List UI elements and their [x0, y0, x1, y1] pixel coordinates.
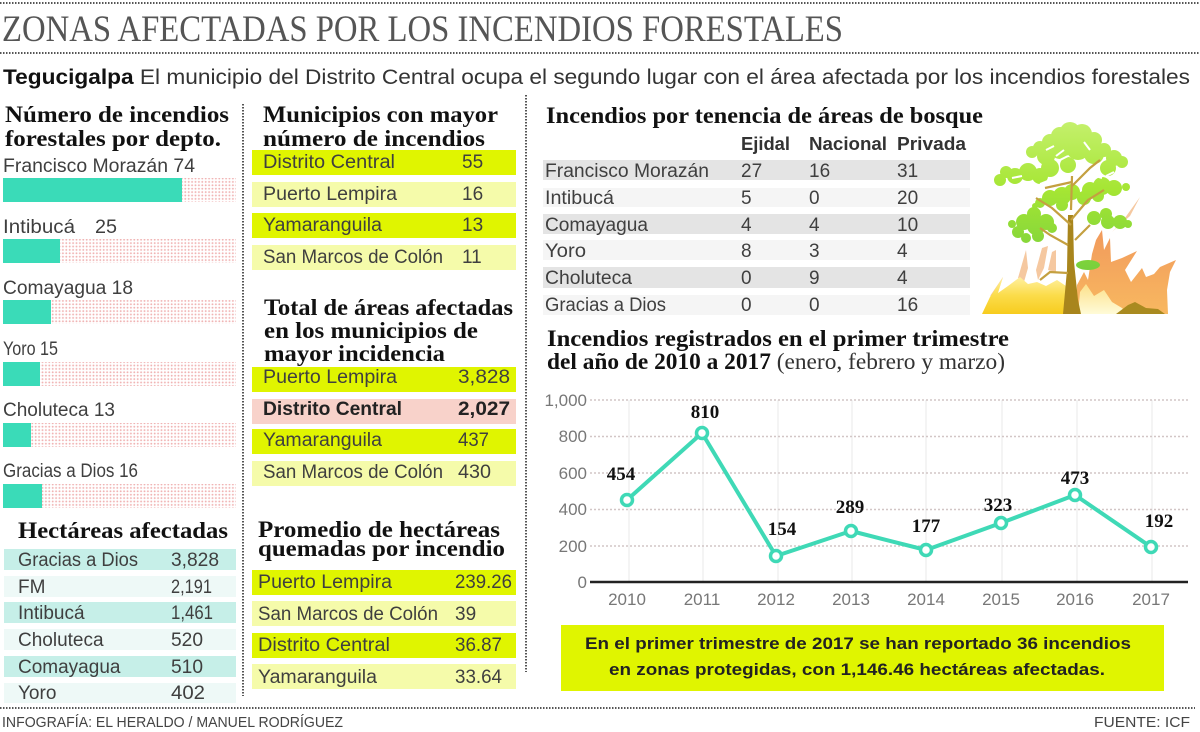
table: hectáreas: 1,461	[171, 603, 213, 624]
table: promedio: 36.87	[455, 635, 502, 656]
table: promedio: Distrito Central	[258, 635, 390, 656]
table: tenencia: 31	[897, 161, 918, 182]
table: tenencia: 4	[897, 241, 908, 262]
data line	[622, 428, 1156, 562]
panel: municipios con mayor número de incendios	[252, 102, 516, 270]
y axis labels: 800	[559, 427, 587, 446]
table: municipios: Distrito Central	[263, 152, 395, 173]
table: tenencia	[543, 134, 970, 316]
heading: total de áreas: mayor incidencia	[264, 341, 446, 366]
branches and trunk	[1036, 160, 1104, 314]
table: hectáreas: Choluteca	[18, 630, 104, 651]
table: tenencia: 10	[897, 215, 918, 236]
data values: 810	[691, 402, 719, 423]
bar: Francisco Morazán	[3, 156, 236, 202]
table: tenencia: Choluteca	[545, 268, 632, 289]
table: promedio: San Marcos de Colón	[258, 604, 438, 625]
x axis labels: 2016	[1056, 590, 1094, 609]
bar: Yoro: Yoro 15	[3, 339, 58, 360]
bar: Francisco Morazán: Francisco Morazán 74	[3, 156, 195, 177]
data values: 192	[1145, 511, 1173, 532]
table: total de áreas: 430	[458, 462, 491, 483]
panel: promedio de hectáreas quemadas	[252, 517, 516, 689]
table: hectáreas	[4, 549, 236, 704]
credit: INFOGRAFÍA: EL HERALDO / MANUEL RODRÍGUEZ	[2, 714, 343, 731]
source: FUENTE: ICF	[1094, 714, 1190, 731]
table: total de áreas: Yamaranguila	[263, 430, 382, 451]
table: tenencia: 5	[741, 188, 752, 209]
y axis labels	[544, 391, 587, 592]
table: total de áreas: 437	[458, 430, 489, 451]
heading: promedio: quemadas por incendio	[258, 536, 505, 561]
table: hectáreas: FM	[18, 577, 45, 598]
table: hectáreas: 520	[171, 630, 203, 651]
icon: burning tree	[982, 122, 1176, 314]
table: hectáreas: Yoro	[18, 683, 56, 704]
heading: promedio: Promedio de hectáreas	[258, 517, 500, 542]
table: municipios: Puerto Lempira	[263, 184, 397, 205]
data values: 154	[768, 519, 797, 540]
foliage	[994, 122, 1132, 270]
heading: incendios registrados: del año de 2010 a 2017 (enero, febrero y marzo)	[547, 349, 1005, 374]
table: total de áreas: 3,828	[458, 367, 510, 388]
table: municipios: Yamaranguila	[263, 215, 382, 236]
table: tenencia: Ejidal	[741, 134, 790, 154]
x axis labels: 2011	[684, 590, 720, 609]
intro text: Tegucigalpa El municipio del Distrito Central ocupa el segundo lugar con el área afectada por los incendios forestales	[3, 66, 1190, 89]
table: tenencia: Privada	[897, 134, 967, 154]
table: tenencia: 9	[809, 268, 820, 289]
callout: en zonas protegidas, con 1,146.46 hectáreas afectadas.	[609, 660, 1105, 679]
table: hectáreas: Comayagua	[18, 657, 121, 678]
x axis labels	[608, 590, 1170, 609]
table: tenencia: Gracias a Dios	[545, 295, 666, 316]
x axis labels: 2015	[982, 590, 1020, 609]
data values: 177	[912, 516, 941, 537]
x axis labels: 2014	[907, 590, 945, 609]
table: tenencia: 3	[809, 241, 820, 262]
heading: número de incendios: Número de incendios	[5, 102, 229, 127]
table: promedio	[252, 570, 516, 689]
table: total de áreas: Puerto Lempira	[263, 367, 397, 388]
y axis labels: 0	[578, 573, 587, 592]
panel: incendios por departamento	[3, 102, 236, 508]
table: tenencia: 20	[897, 188, 918, 209]
line chart	[544, 391, 1188, 609]
table: tenencia: 8	[741, 241, 752, 262]
table: total de áreas	[252, 367, 516, 486]
table: hectáreas: 510	[171, 657, 203, 678]
heading: municipios	[263, 102, 498, 151]
table: tenencia: 16	[809, 161, 830, 182]
heading: número de incendios	[5, 102, 229, 151]
heading: hectáreas afectadas: Hectáreas afectadas	[18, 518, 228, 543]
bar: Comayagua	[3, 278, 236, 324]
table: promedio: 33.64	[455, 667, 502, 688]
heading: incendios registrados	[547, 326, 1009, 374]
table: municipios: 55	[462, 152, 483, 173]
table: tenencia: 4	[809, 215, 820, 236]
table: tenencia: Nacional	[809, 134, 887, 154]
y axis labels: 600	[559, 464, 587, 483]
table: tenencia: Comayagua	[545, 215, 648, 236]
data values	[607, 402, 1173, 540]
table: promedio: Puerto Lempira	[258, 572, 392, 593]
bar: Intibucá: Intibucá	[3, 217, 75, 238]
heading: total de áreas: en los municipios de	[264, 318, 478, 343]
data values: 473	[1061, 468, 1089, 489]
table: hectáreas: 402	[171, 683, 205, 704]
heading: total de áreas: Total de áreas afectadas	[264, 295, 513, 320]
table: municipios: 16	[462, 184, 483, 205]
table: tenencia: 16	[897, 295, 918, 316]
table: promedio: 39	[455, 604, 476, 625]
bar: Choluteca	[3, 400, 236, 447]
table: tenencia: Yoro	[545, 241, 586, 262]
bar: Choluteca: Choluteca 13	[3, 400, 115, 421]
table: total de áreas: San Marcos de Colón	[263, 462, 443, 483]
bar: Yoro	[3, 339, 236, 386]
bar: Gracias a Dios	[3, 461, 236, 508]
heading: tenencia: Incendios por tenencia de áreas de bosque	[546, 103, 983, 128]
flames	[982, 197, 1176, 314]
x axis labels: 2017	[1132, 590, 1170, 609]
table: tenencia: 0	[741, 295, 752, 316]
table: municipios: San Marcos de Colón	[263, 247, 443, 268]
table: tenencia: 4	[741, 215, 752, 236]
heading: número de incendios: forestales por depto.	[5, 126, 221, 151]
bar: Comayagua: Comayagua 18	[3, 278, 133, 299]
panel: hectáreas afectadas	[4, 518, 236, 704]
heading: incendios registrados: Incendios registrados en el primer trimestre	[547, 326, 1009, 351]
x axis labels: 2013	[832, 590, 870, 609]
table: promedio: 239.26	[455, 572, 512, 593]
title: ZONAS AFECTADAS POR LOS INCENDIOS FORESTALES	[2, 9, 843, 50]
panel: total de áreas afectadas	[252, 295, 516, 486]
bar: Gracias a Dios: Gracias a Dios 16	[3, 461, 138, 482]
y axis labels: 200	[559, 537, 587, 556]
table: hectáreas: Intibucá	[18, 603, 85, 624]
table: tenencia: 27	[741, 161, 762, 182]
table: tenencia: 0	[809, 188, 820, 209]
table: tenencia: 0	[741, 268, 752, 289]
table: municipios	[252, 150, 516, 270]
callout: En el primer trimestre de 2017 se han reportado 36 incendios	[585, 634, 1131, 653]
foliage gaps	[1012, 142, 1114, 184]
table: hectáreas: Gracias a Dios	[18, 550, 138, 571]
table: tenencia: Intibucá	[545, 188, 614, 209]
table: hectáreas: 3,828	[171, 550, 219, 571]
table: tenencia: 0	[809, 295, 820, 316]
heading: total de áreas	[264, 295, 513, 366]
y axis labels: 400	[559, 500, 587, 519]
bar: Intibucá	[3, 217, 236, 263]
panel: incendios por tenencia	[543, 103, 983, 316]
table: hectáreas: 2,191	[171, 577, 212, 598]
callout	[561, 625, 1164, 691]
table: municipios: 11	[462, 247, 482, 268]
table: municipios: 13	[462, 215, 483, 236]
heading: municipios: Municipios con mayor	[263, 102, 498, 127]
table: total de áreas: 2,027	[458, 399, 510, 420]
table: promedio: Yamaranguila	[258, 667, 377, 688]
y axis labels: 1,000	[544, 391, 587, 410]
bar: Intibucá: 25	[95, 217, 117, 238]
table: total de áreas: Distrito Central	[263, 399, 402, 420]
data values: 289	[836, 497, 864, 518]
table: tenencia: 4	[897, 268, 908, 289]
x axis labels: 2012	[757, 590, 795, 609]
heading: municipios: número de incendios	[263, 126, 485, 151]
heading: promedio	[258, 517, 505, 561]
table: tenencia: Francisco Morazán	[545, 161, 709, 182]
data values: 323	[984, 495, 1012, 516]
data values: 454	[607, 464, 636, 485]
x axis labels: 2010	[608, 590, 646, 609]
